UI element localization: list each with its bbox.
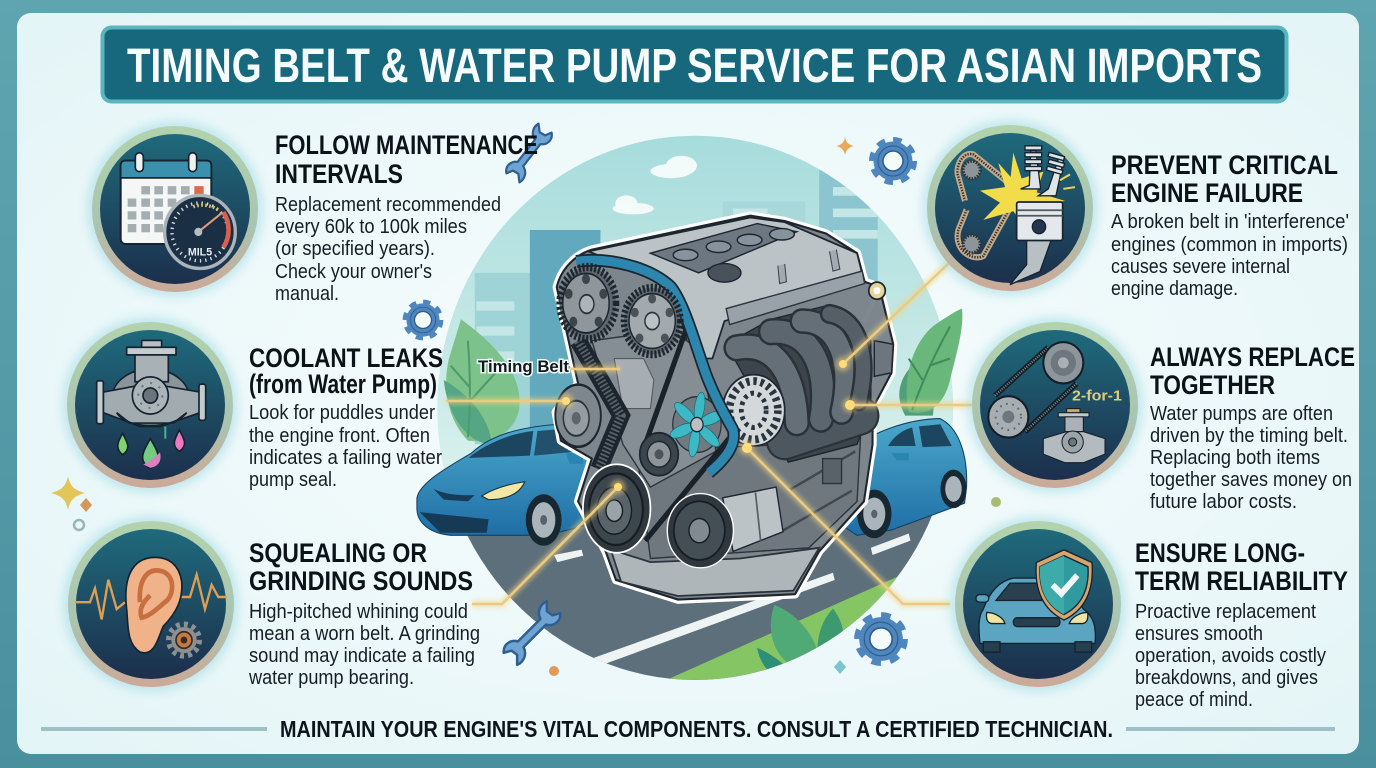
serpentine belts — [576, 260, 734, 541]
icon: car and shield — [976, 550, 1095, 652]
timing cover — [592, 330, 716, 487]
text block: coolant leaks — [249, 343, 443, 491]
text block: squealing or grinding sounds: sound may indicate a failing — [249, 645, 475, 667]
valve cover — [588, 217, 863, 359]
text block: follow maintenance intervals: (or specified years). — [275, 238, 435, 260]
icon: pulleys and pump: 2-for-1 — [1072, 388, 1122, 405]
text block: ensure long-term reliability: ENSURE LONG- — [1135, 538, 1305, 568]
decorative sparkle left — [51, 476, 92, 530]
text block: prevent critical engine failure: A broken belt in 'interference' — [1111, 211, 1349, 233]
text block: follow maintenance intervals: every 60k to 100k miles — [275, 216, 467, 238]
callout line: long-term reliability — [747, 448, 950, 604]
text block: squealing or grinding sounds: mean a worn belt. A grinding — [249, 623, 480, 645]
text block: always replace together: Replacing both items — [1150, 447, 1320, 469]
icon: pulleys and pump — [988, 342, 1122, 463]
circle: car and shield — [950, 516, 1126, 692]
callout line: engine failure — [843, 262, 950, 364]
text block: prevent critical engine failure — [1111, 150, 1349, 300]
callout line: squealing sounds — [472, 487, 618, 604]
text block: always replace together: future labor costs. — [1150, 491, 1297, 513]
text block: prevent critical engine failure: engine damage. — [1111, 278, 1238, 300]
right leaf — [899, 309, 962, 416]
crankshaft pulley — [583, 464, 650, 553]
text block: follow maintenance intervals: FOLLOW MAINTENANCE — [275, 130, 538, 160]
text block: squealing or grinding sounds: water pump bearing. — [248, 667, 414, 689]
circle: leaking water pump — [62, 317, 238, 493]
text block: always replace together: together saves money on — [1150, 469, 1352, 491]
text block: coolant leaks: pump seal. — [249, 469, 337, 491]
compressor — [667, 487, 783, 568]
icon: gear bottom — [859, 617, 903, 661]
callout line: coolant leaks — [446, 400, 566, 402]
callout line: replace together — [850, 404, 972, 406]
text block: ensure long-term reliability: Proactive replacement — [1135, 601, 1316, 623]
exhaust manifold — [726, 305, 871, 462]
text block: ensure long-term reliability — [1135, 538, 1348, 711]
water pump impeller — [668, 391, 725, 458]
icon: water pump — [97, 340, 206, 469]
icon: sparkle orange — [836, 137, 854, 155]
text block: squealing or grinding sounds: High-pitched whining could — [249, 601, 468, 623]
central illustration scene — [417, 130, 970, 690]
circle: belt and pump 2-for-1 — [967, 317, 1143, 493]
icon: calendar — [121, 153, 235, 268]
text block: squealing or grinding sounds: SQUEALING OR — [249, 538, 427, 568]
text block: prevent critical engine failure: causes severe internal — [1111, 256, 1290, 278]
text block: follow maintenance intervals: Replacement recommended — [275, 194, 501, 216]
text block: always replace together: Water pumps are often — [1150, 403, 1333, 425]
circle: belt failure and piston — [922, 120, 1098, 296]
dipstick — [865, 282, 885, 323]
icon: wrench top — [502, 122, 556, 184]
icon: ear and gear — [75, 557, 227, 656]
camshaft sprocket right — [624, 288, 680, 354]
footer: MAINTAIN YOUR ENGINE'S VITAL COMPONENTS. CONSULT A CERTIFIED TECHNICIAN. — [280, 716, 1113, 742]
text block: follow maintenance intervals — [275, 130, 538, 305]
title banner — [102, 28, 1286, 102]
icon: broken belt and piston — [957, 146, 1075, 285]
right car — [843, 419, 967, 538]
text block: coolant leaks: (from Water Pump) — [249, 369, 437, 399]
icon: gear left — [406, 303, 440, 337]
text block: follow maintenance intervals: INTERVALS — [275, 159, 403, 189]
alternator — [723, 375, 785, 446]
lower block — [637, 437, 860, 559]
text block: always replace together: driven by the timing belt. — [1150, 425, 1348, 447]
left car — [417, 425, 595, 546]
text block: squealing or grinding sounds — [248, 538, 480, 689]
text block: ensure long-term reliability: breakdowns, and gives — [1135, 667, 1318, 689]
text block: ensure long-term reliability: ensures smooth — [1135, 623, 1263, 645]
left idler pulley — [555, 385, 601, 447]
text block: always replace together — [1150, 342, 1355, 513]
text block: follow maintenance intervals: Check your owner's — [275, 261, 432, 283]
engine illustration — [555, 216, 893, 600]
circle: ear and sound waves — [63, 516, 239, 692]
decorative dots — [549, 497, 1001, 676]
text block: coolant leaks: the engine front. Often — [249, 425, 430, 447]
text block: prevent critical engine failure: engines (common in imports) — [1111, 234, 1348, 256]
callout dots — [562, 360, 855, 491]
tensioner pulley — [640, 433, 678, 476]
circle: calendar and odometer — [87, 121, 263, 297]
text block: ensure long-term reliability: peace of mind. — [1135, 689, 1253, 711]
icon: wrench bottom — [499, 600, 565, 666]
text block: squealing or grinding sounds: GRINDING SOUNDS — [249, 566, 473, 596]
text block: coolant leaks: indicates a failing water — [249, 447, 442, 469]
text block: coolant leaks: COOLANT LEAKS — [249, 343, 443, 373]
callout glow — [446, 262, 972, 604]
text block: coolant leaks: Look for puddles under — [249, 402, 435, 424]
text block: prevent critical engine failure: PREVENT CRITICAL — [1111, 150, 1338, 180]
text block: follow maintenance intervals: manual. — [275, 283, 339, 305]
text block: always replace together: TOGETHER — [1150, 370, 1275, 400]
timing belt label: Timing Belt — [478, 357, 569, 376]
text block: prevent critical engine failure: ENGINE FAILURE — [1111, 178, 1303, 208]
oil pan — [611, 548, 819, 596]
text block: ensure long-term reliability: operation, avoids costly — [1135, 645, 1326, 667]
icon: calendar: MIL5 — [188, 247, 212, 259]
camshaft sprocket left — [560, 267, 616, 339]
icon: gear top — [873, 141, 913, 181]
